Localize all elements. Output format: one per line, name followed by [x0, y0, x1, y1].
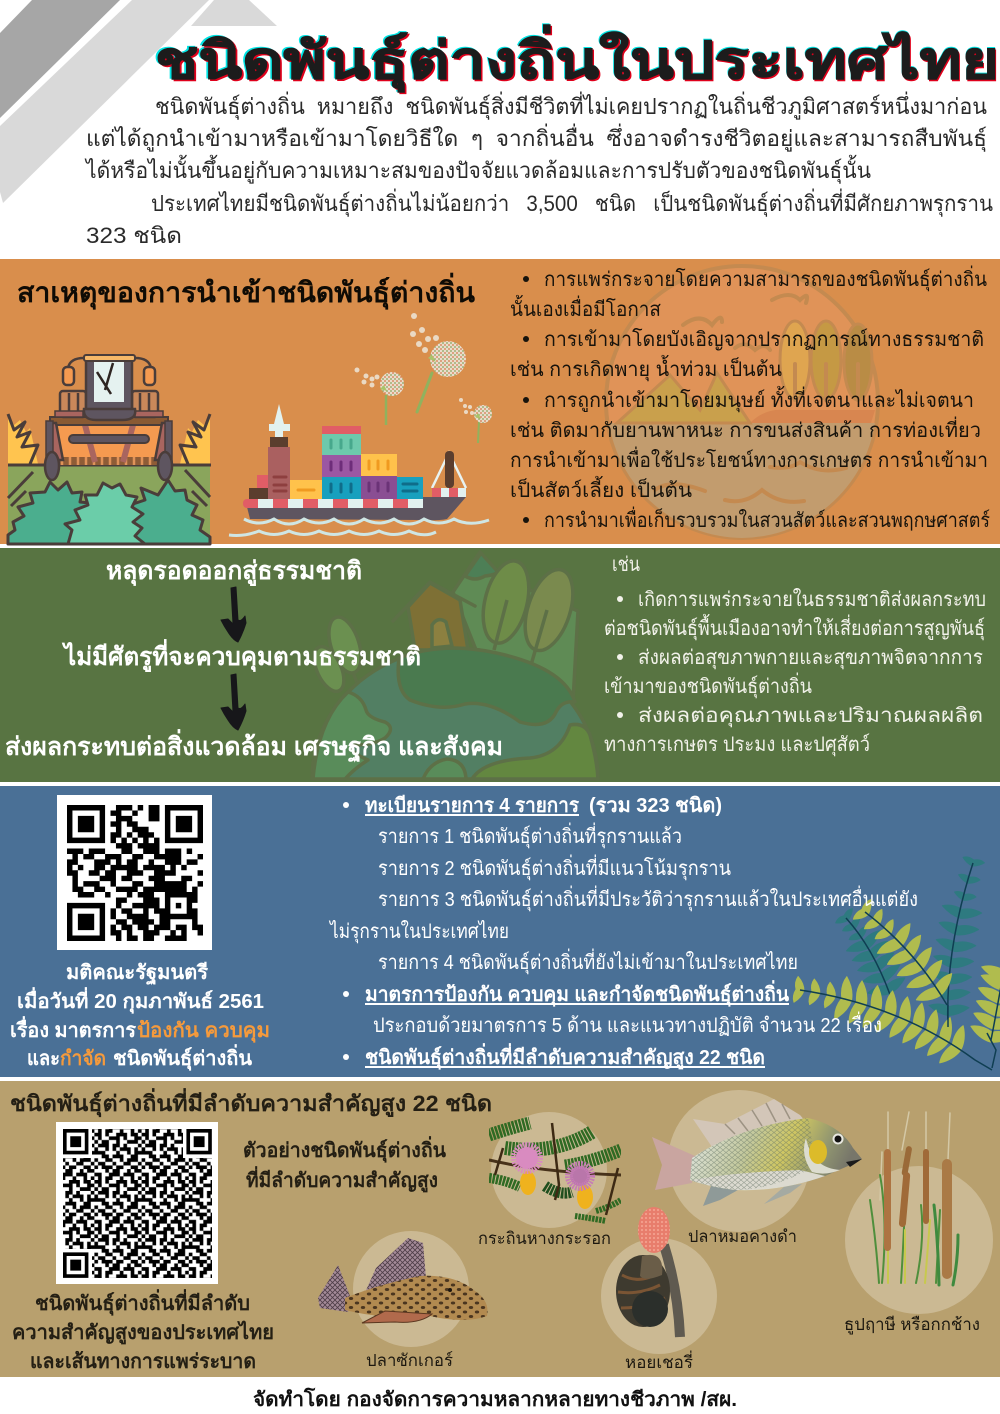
flow step 1: หลุดรอดออกสู่ธรรมชาติ	[106, 557, 362, 587]
flow step 2: ไม่มีศัตรูที่จะควบคุมตามธรรมชาติ	[61, 639, 421, 673]
measures list: ไม่รุกรานในประเทศไทย	[328, 920, 509, 944]
label: sucker catfish: ปลาซักเกอร์	[366, 1351, 453, 1370]
arrow down 1	[221, 587, 246, 642]
intro text block: แต่ได้ถูกนำเข้ามาหรือเข้ามาโดยวิธีใด ๆ จากถิ่นอื่น ซึ่งอาจดำรงชีวิตอยู่และสามารถสืบพันธุ์	[86, 123, 987, 152]
causes list: เช่น ติดมากับยานพาหนะ การขนส่งสินค้า การท่องเที่ยว	[510, 416, 981, 442]
watermark: earth with house and trees	[308, 552, 598, 779]
intro text block: ชนิดพันธุ์ต่างถิ่น หมายถึง ชนิดพันธุ์สิ่งมีชีวิตที่ไม่เคยปรากฏในถิ่นชีวภูมิศาสตร์หนึ่งมาก่อน	[155, 91, 987, 120]
flow step 3: ส่งผลกระทบต่อสิ่งแวดล้อม เศรษฐกิจ และสังคม	[5, 729, 503, 763]
cabinet resolution caption: เรื่อง มาตรการ	[10, 1015, 136, 1042]
causes list: การนำเข้ามาเพื่อใช้ประโยชน์ทางการเกษตร การนำเข้ามา	[510, 446, 988, 472]
measures list: รายการ 1 ชนิดพันธุ์ต่างถิ่นที่รุกรานแล้ว	[378, 822, 682, 849]
causes list: นั้นเองเมื่อมีโอกาส	[510, 295, 661, 321]
QR 2 caption: ชนิดพันธุ์ต่างถิ่นที่มีลำดับ	[35, 1288, 250, 1316]
panel: causes of introduction	[0, 259, 1000, 544]
impacts list: เช่น	[612, 554, 640, 576]
impacts list: ส่งผลต่อสุขภาพกายและสุขภาพจิตจากการ	[638, 647, 983, 670]
causes list: การแพร่กระจายโดยความสามารถของชนิดพันธุ์ต่างถิ่น	[544, 265, 987, 292]
cabinet resolution caption: มติคณะรัฐมนตรี	[66, 961, 208, 986]
footer credit: จัดทำโดย กองจัดการความหลากหลายทางชีวภาพ /สผ.	[253, 1387, 737, 1411]
cabinet resolution caption: ชนิดพันธุ์ต่างถิ่น	[113, 1043, 252, 1071]
label: leucaena: กระถินหางกระรอก	[478, 1229, 611, 1248]
panel: cabinet resolution and measures	[0, 786, 1000, 1077]
species: cattail	[844, 1112, 993, 1335]
icon: harvester in field	[8, 355, 211, 544]
measures list: (รวม 323 ชนิด)	[589, 795, 722, 817]
causes list	[510, 265, 990, 532]
species: leucaena	[478, 1112, 621, 1248]
QR code 1	[57, 795, 212, 950]
example species caption	[243, 1135, 446, 1194]
species: sucker catfish	[318, 1231, 488, 1370]
cabinet resolution caption: และ	[27, 1048, 60, 1070]
watermark: landscape circle	[606, 266, 878, 538]
causes list: เป็นสัตว์เลี้ยง เป็นต้น	[510, 476, 692, 502]
QR 2 caption: และเส้นทางการแพร่ระบาด	[30, 1350, 256, 1373]
measures list: รายการ 3 ชนิดพันธุ์ต่างถิ่นที่มีประวัติว่ารุกรานแล้วในประเทศอื่นแต่ยัง	[378, 885, 918, 912]
title: ชนิดพันธุ์ต่างถิ่นในประเทศไทย	[155, 25, 999, 93]
QR 2 caption: ความสำคัญสูงของประเทศไทย	[12, 1320, 274, 1346]
panel: priority species	[0, 1081, 1000, 1377]
example species caption: ที่มีลำดับความสำคัญสูง	[246, 1165, 438, 1194]
label: golden apple snail: หอยเชอรี่	[625, 1350, 693, 1372]
measures list: ประกอบด้วยมาตรการ 5 ด้าน และแนวทางปฏิบัติ จำนวน 22 เรื่อง	[373, 1011, 882, 1037]
cabinet resolution caption: เมื่อวันที่ 20 กุมภาพันธ์ 2561	[17, 986, 264, 1014]
measures list	[328, 794, 918, 1071]
cabinet resolution caption	[10, 961, 270, 1071]
example species caption: ตัวอย่างชนิดพันธุ์ต่างถิ่น	[243, 1135, 446, 1163]
measures list: มาตรการป้องกัน ควบคุม และกำจัดชนิดพันธุ์ต่างถิ่น	[365, 979, 789, 1007]
cabinet resolution caption: ป้องกัน ควบคุม	[137, 1019, 270, 1043]
impacts list: เข้ามาของชนิดพันธุ์ต่างถิ่น	[604, 672, 812, 699]
measures list: รายการ 4 ชนิดพันธุ์ต่างถิ่นที่ยังไม่เข้ามาในประเทศไทย	[378, 948, 798, 975]
causes list: การถูกนำเข้ามาโดยมนุษย์ ทั้งที่เจตนาและไม่เจตนา	[544, 386, 974, 413]
icon: container ship	[229, 404, 489, 536]
QR 2 caption	[12, 1288, 274, 1373]
heading: causes: สาเหตุของการนำเข้าชนิดพันธุ์ต่างถิ่น	[17, 272, 475, 310]
arrow down 2	[221, 674, 246, 730]
intro text block	[84, 91, 993, 248]
species: blackchin tilapia	[652, 1090, 862, 1246]
intro text block: ได้หรือไม่นั้นขึ้นอยู่กับความเหมาะสมของปัจจัยแวดล้อมและการปรับตัวของชนิดพันธุ์นั้น	[84, 155, 871, 184]
species: golden apple snail	[601, 1207, 717, 1372]
measures list: ชนิดพันธุ์ต่างถิ่นที่มีลำดับความสำคัญสูง 22 ชนิด	[365, 1042, 765, 1071]
heading: 22 priority species: ชนิดพันธุ์ต่างถิ่นที่มีลำดับความสำคัญสูง 22 ชนิด	[10, 1087, 492, 1118]
decorative grey header shapes	[0, 0, 277, 203]
title: ชนิดพันธุ์ต่างถิ่นในประเทศไทย	[157, 26, 1000, 94]
impacts list	[604, 554, 986, 757]
QR code 2	[56, 1122, 218, 1284]
decorative fern	[792, 856, 1000, 1070]
causes list: การเข้ามาโดยบังเอิญจากปรากฏการณ์ทางธรรมชาติ	[544, 328, 984, 351]
measures list: รายการ 2 ชนิดพันธุ์ต่างถิ่นที่มีแนวโน้มรุกราน	[378, 854, 731, 881]
cabinet resolution caption: กำจัด	[60, 1048, 106, 1070]
impacts list: ส่งผลต่อคุณภาพและปริมาณผลผลิต	[638, 705, 983, 728]
label: cattail: ธูปฤาษี หรือกกช้าง	[844, 1315, 980, 1335]
icon: dandelions	[354, 313, 492, 443]
flow: causes to impacts	[5, 557, 503, 763]
title	[153, 24, 1000, 94]
title: ชนิดพันธุ์ต่างถิ่นในประเทศไทย	[153, 24, 999, 92]
intro text block: 323 ชนิด	[86, 223, 182, 248]
panel: impacts	[0, 548, 1000, 782]
label: blackchin tilapia: ปลาหมอคางดำ	[688, 1227, 797, 1246]
measures list: ทะเบียนรายการ 4 รายการ	[365, 794, 579, 817]
impacts list: ทางการเกษตร ประมง และปศุสัตว์	[604, 733, 870, 757]
causes list: เช่น การเกิดพายุ น้ำท่วม เป็นต้น	[510, 355, 782, 382]
